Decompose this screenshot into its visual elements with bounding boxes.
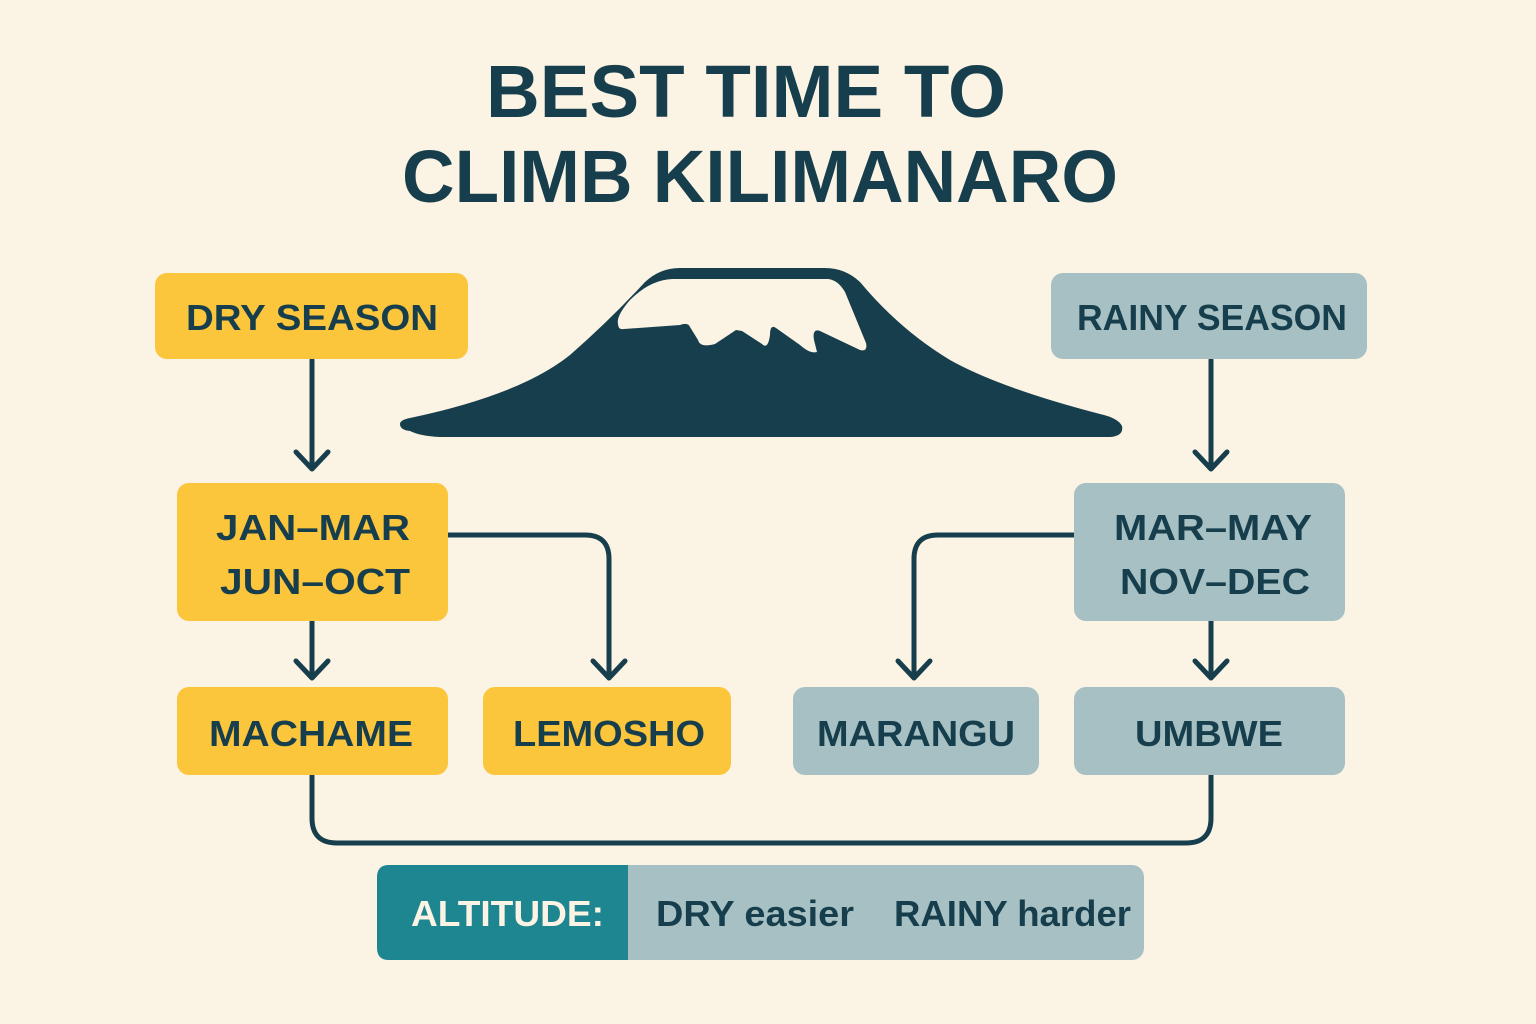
panel: rainy season: RAINY SEASON	[1077, 297, 1347, 338]
altitude bar: RAINY harder	[894, 893, 1131, 934]
panel: dry months	[177, 483, 448, 621]
route: marangu	[793, 687, 1039, 775]
panel: rainy months: NOV–DEC	[1120, 561, 1310, 602]
route: lemosho	[483, 687, 731, 775]
panel: rainy months: MAR–MAY	[1114, 507, 1312, 548]
title: CLIMB KILIMANARO	[402, 135, 1118, 218]
icon: mountain	[400, 268, 1122, 437]
altitude bar: ALTITUDE:	[411, 893, 604, 934]
route: lemosho: LEMOSHO	[513, 713, 705, 754]
panel: dry season: DRY SEASON	[186, 297, 438, 338]
route: umbwe: UMBWE	[1135, 713, 1283, 754]
panel: rainy season	[1051, 273, 1367, 359]
arrows	[296, 360, 1227, 843]
title: BEST TIME TO	[486, 50, 1006, 133]
panel: dry months: JUN–OCT	[220, 561, 410, 602]
panel: dry months: JAN–MAR	[216, 507, 410, 548]
panel: rainy months	[1074, 483, 1345, 621]
route: machame	[177, 687, 448, 775]
route: umbwe	[1074, 687, 1345, 775]
altitude bar: DRY easier	[656, 893, 854, 934]
route: marangu: MARANGU	[817, 713, 1015, 754]
altitude bar	[377, 865, 1144, 960]
route: machame: MACHAME	[209, 713, 413, 754]
title	[402, 50, 1118, 218]
panel: dry season	[155, 273, 468, 359]
